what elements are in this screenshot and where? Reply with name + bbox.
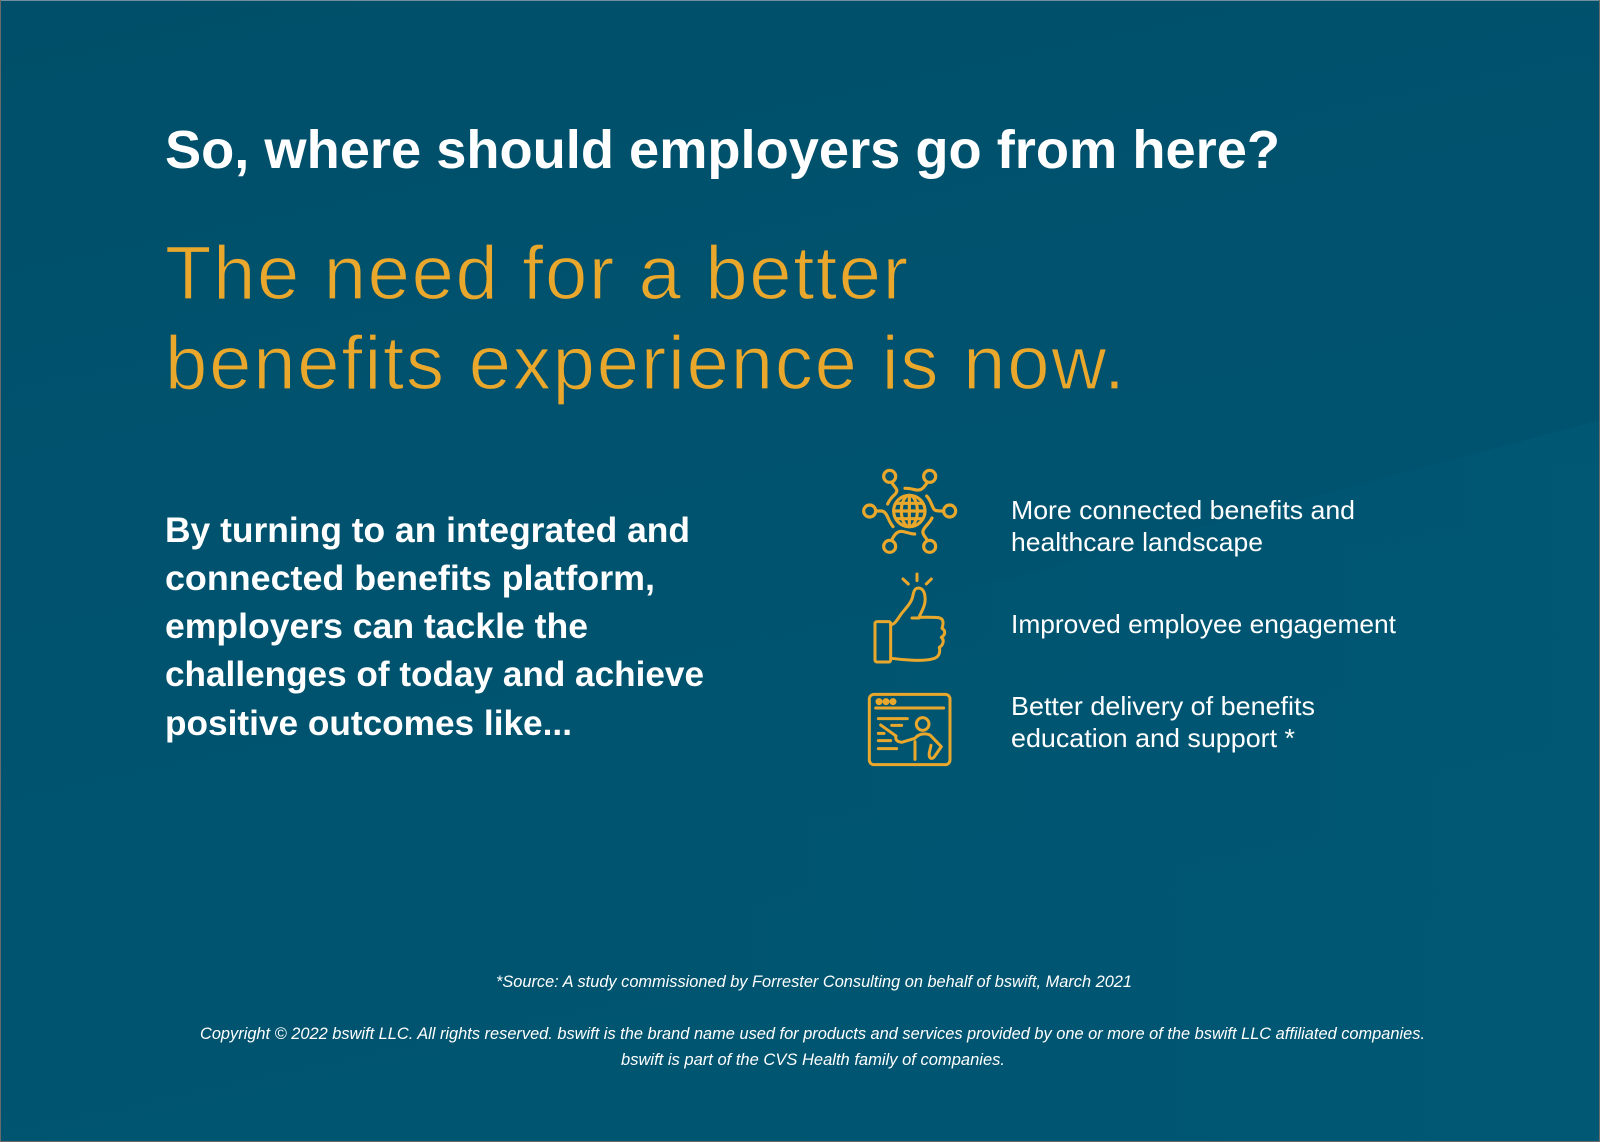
icon: connected globe	[864, 470, 956, 552]
intro paragraph	[165, 511, 704, 743]
footnotes	[200, 972, 1425, 1069]
icon: thumbs up	[875, 574, 945, 662]
headline	[165, 231, 1125, 406]
benefit list: More connected benefits and	[1011, 495, 1355, 525]
intro paragraph: By turning to an integrated and	[165, 511, 690, 550]
intro paragraph: challenges of today and achieve	[165, 655, 704, 694]
footnotes: bswift is part of the CVS Health family of companies.	[621, 1050, 1005, 1069]
headline: The need for a better	[165, 231, 908, 316]
benefit list: education and support *	[1011, 723, 1295, 753]
footnotes: Copyright © 2022 bswift LLC. All rights reserved. bswift is the brand name used for products and services provided by one or more of the bswift LLC affiliated companies.	[200, 1024, 1425, 1043]
intro paragraph: connected benefits platform,	[165, 559, 655, 598]
benefit list	[1011, 495, 1397, 753]
icon: online presenter	[869, 694, 950, 765]
benefit list: healthcare landscape	[1011, 527, 1263, 557]
title: So, where should employers go from here?	[165, 120, 1280, 180]
intro paragraph: employers can tackle the	[165, 607, 588, 646]
benefit list: Better delivery of benefits	[1011, 691, 1315, 721]
footnotes: *Source: A study commissioned by Forrester Consulting on behalf of bswift, March 2021	[496, 972, 1132, 991]
intro paragraph: positive outcomes like...	[165, 704, 572, 743]
benefit list: Improved employee engagement	[1011, 609, 1397, 639]
headline: benefits experience is now.	[165, 321, 1125, 406]
